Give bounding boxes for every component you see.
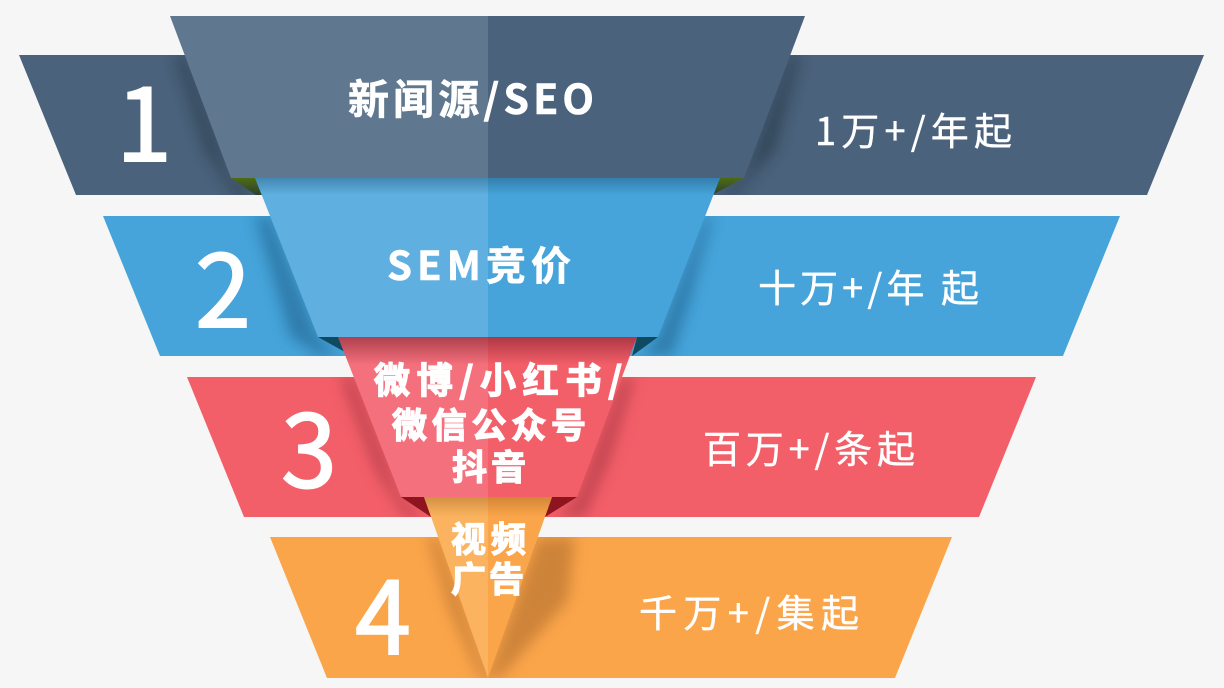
funnel tier 1 bbox=[170, 16, 805, 178]
number 3: 3 bbox=[281, 371, 337, 516]
tier 4 label: 广告 bbox=[451, 552, 524, 603]
number 2: 2 bbox=[195, 211, 251, 356]
funnel shadows on bands bbox=[175, 55, 800, 678]
price 2: 十万+/年 起 bbox=[758, 258, 979, 313]
fold triangles bbox=[231, 178, 744, 517]
tier 3 label: 微博/小红书/ bbox=[374, 352, 622, 404]
tier 2 label: SEM竞价 bbox=[387, 234, 571, 292]
number 4: 4 bbox=[355, 538, 411, 683]
band 2: blue bbox=[103, 211, 1120, 356]
price 3: 百万+/条起 bbox=[703, 419, 915, 474]
tier 1 label: 新闻源/SEO bbox=[348, 66, 594, 126]
funnel tier 2 bbox=[255, 178, 720, 337]
number 1: 1 bbox=[116, 45, 172, 190]
tier 3 label: 微信公众号 bbox=[392, 398, 586, 449]
funnel tier 3 bbox=[338, 337, 637, 497]
band 4: orange bbox=[270, 537, 952, 683]
tier 3 label: 抖音 bbox=[452, 440, 526, 491]
tier 4 label: 视频 bbox=[451, 512, 526, 563]
band 3: red bbox=[187, 371, 1036, 517]
band 1: dark slate bbox=[19, 45, 1204, 195]
tier 4 label bbox=[451, 512, 526, 603]
funnel tier 4 bbox=[424, 497, 552, 678]
price 4: 千万+/集起 bbox=[639, 583, 859, 638]
tier 3 label bbox=[374, 352, 622, 491]
price 1: 1万+/年起 bbox=[815, 101, 1012, 156]
